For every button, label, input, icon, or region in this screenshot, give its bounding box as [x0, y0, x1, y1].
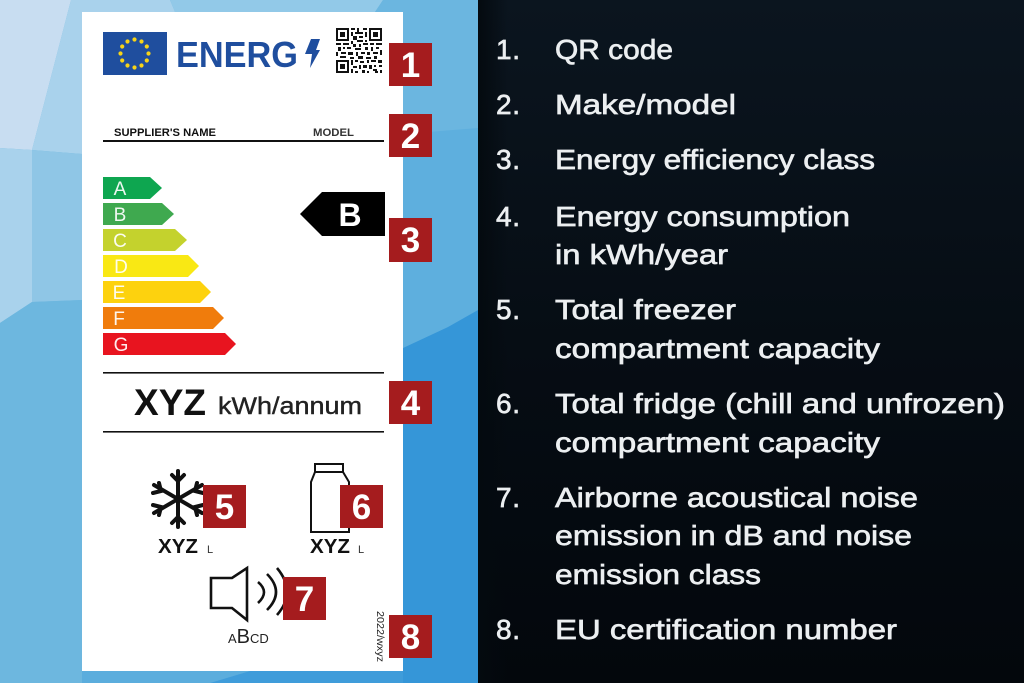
text: energy consumption [134, 382, 362, 423]
bar F: F [113, 309, 125, 330]
panel: energy label card [82, 12, 403, 671]
text: model: MODEL [313, 127, 354, 139]
legend item 4 [496, 201, 850, 270]
legend item 2: 2. [496, 89, 520, 120]
legend item 4: 4. [496, 201, 520, 232]
bar C [103, 229, 187, 252]
bar D: D [114, 257, 128, 278]
legend item 7 [496, 482, 918, 590]
bar B: B [114, 205, 126, 226]
icon: milk carton [311, 464, 349, 532]
icon: lightning bolt [305, 39, 320, 68]
legend item 7: 7. [496, 482, 520, 513]
legend item 7: emission in dB and noise [555, 520, 912, 551]
text: freezer capacity: XYZ [158, 536, 198, 558]
badge 2 [389, 114, 432, 157]
legend item 3: 3. [496, 144, 520, 175]
badge 5 [203, 485, 246, 528]
legend item 1: 1. [496, 34, 520, 65]
chart: energy class scale [103, 177, 236, 356]
bar A: A [114, 179, 127, 200]
badge 2: 2 [401, 117, 420, 156]
legend item 5: compartment capacity [555, 333, 880, 364]
badge 8: 8 [401, 618, 420, 657]
icon: speaker [211, 568, 287, 620]
badge 1: 1 [401, 46, 420, 85]
heading: ENERG: ENERG [176, 34, 298, 75]
text: freezer capacity: L [207, 544, 213, 556]
icon: QR code [336, 28, 382, 73]
legend item 1 [496, 34, 673, 65]
legend item 8: 8. [496, 614, 520, 645]
badge 4: 4 [401, 384, 421, 423]
badge 7: 7 [295, 580, 314, 619]
text: energy consumption: kWh/annum [218, 393, 362, 420]
panel: dark legend background [478, 0, 1024, 683]
icon: snowflake [153, 471, 203, 527]
legend item 8: EU certification number [555, 614, 897, 645]
arrow: current class B [300, 192, 385, 236]
legend item 5 [496, 294, 880, 364]
badge 1 [389, 43, 432, 86]
badge 6: 6 [352, 488, 371, 527]
legend item 6: compartment capacity [555, 427, 880, 458]
badge 3 [389, 218, 432, 262]
text: supplier's name: SUPPLIER'S NAME [114, 127, 216, 139]
bar B [103, 203, 174, 226]
legend item 3: Energy efficiency class [555, 144, 875, 175]
bar G [103, 333, 236, 356]
legend item 2: Make/model [555, 89, 736, 120]
legend item 5: Total freezer [555, 294, 736, 325]
legend item 6: Total fridge (chill and unfrozen) [555, 388, 1005, 419]
bar A [103, 177, 162, 200]
badge 8 [389, 615, 432, 658]
badge 7 [283, 577, 326, 620]
bar D [103, 255, 199, 278]
text: fridge capacity: L [358, 544, 364, 556]
text: fridge capacity: XYZ [310, 536, 350, 558]
legend item 4: Energy consumption [555, 201, 850, 232]
bar G: G [114, 335, 128, 356]
bar C: C [113, 231, 127, 252]
legend item 4: in kWh/year [555, 239, 728, 270]
bar E [103, 281, 211, 304]
bar E: E [113, 283, 125, 304]
badge 4 [389, 381, 432, 424]
bar F [103, 307, 224, 330]
panel: faceted blue background [0, 0, 478, 683]
legend item 7: Airborne acoustical noise [555, 482, 918, 513]
legend item 5: 5. [496, 294, 520, 325]
legend item 1: QR code [555, 34, 673, 65]
badge 5: 5 [215, 488, 234, 527]
badge 6 [340, 485, 383, 528]
legend item 2 [496, 89, 736, 120]
arrow: current class B: B [338, 197, 362, 233]
badge 3: 3 [401, 221, 420, 260]
legend item 7: emission class [555, 559, 761, 590]
text: energy consumption: XYZ [134, 382, 206, 423]
legend item 6: 6. [496, 388, 520, 419]
text: noise class: ABCD [228, 626, 269, 648]
legend item 6 [496, 388, 1005, 458]
icon: EU flag [103, 32, 167, 75]
text: certification number: 2022/wxyz [374, 611, 385, 662]
